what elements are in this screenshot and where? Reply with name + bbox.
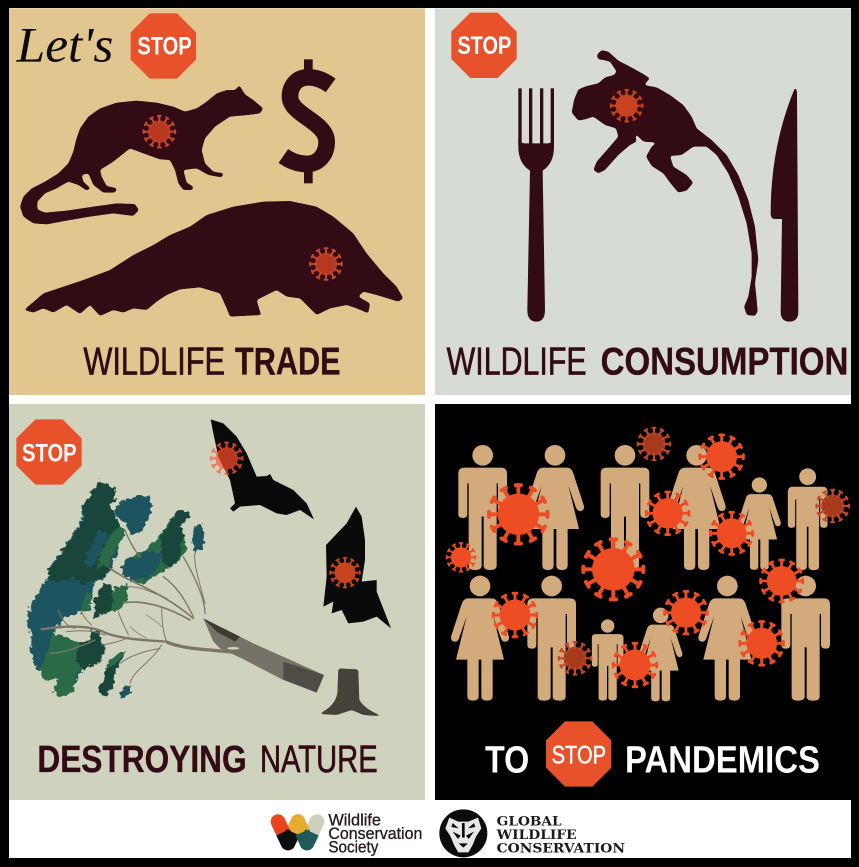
stop sign: STOP	[137, 33, 192, 61]
script text: Let's: Let's	[16, 17, 113, 73]
bat with virus	[211, 419, 314, 519]
text: Global Wildlife Conservation	[496, 814, 625, 855]
heading: wildlife trade: TRADE	[235, 339, 341, 383]
stop sign	[131, 13, 196, 79]
virus particles	[447, 428, 849, 687]
civet silhouette	[20, 85, 263, 224]
heading: destroying nature: NATURE	[260, 739, 378, 781]
stop sign: STOP	[552, 741, 606, 769]
heading: to stop pandemics: PANDEMICS	[625, 739, 820, 781]
logo: Wildlife Conservation Society: Wildlife	[328, 810, 381, 829]
tree stump	[318, 668, 386, 717]
fallen tree	[27, 480, 324, 698]
heading: destroying nature: DESTROYING	[37, 739, 247, 781]
panel: wildlife trade	[9, 8, 425, 395]
tree trunk	[167, 618, 324, 693]
tree canopy	[27, 480, 205, 698]
panel: to stop pandemics	[435, 404, 859, 800]
pangolin silhouette	[24, 201, 403, 317]
text: Global Wildlife Conservation: GLOBAL	[497, 814, 562, 829]
tree branches	[42, 530, 205, 683]
panel: wildlife consumption	[435, 8, 851, 395]
logo: Wildlife Conservation Society	[278, 810, 422, 856]
stop sign: STOP	[22, 439, 77, 467]
stop sign: STOP	[457, 32, 511, 60]
virus on pangolin	[310, 248, 342, 280]
dollar sign	[283, 59, 331, 183]
heading: to stop pandemics	[485, 721, 820, 787]
logo: Wildlife Conservation Society: Conservation	[328, 824, 422, 843]
virus on monkey	[611, 90, 642, 121]
logo: tiger badge	[439, 809, 487, 857]
panel: destroying nature	[9, 404, 425, 800]
text: Global Wildlife Conservation: WILDLIFE	[496, 827, 577, 842]
stop sign	[546, 721, 611, 787]
crowd of people	[451, 445, 830, 701]
second bat with virus	[323, 507, 391, 628]
knife	[771, 89, 798, 322]
logo: Wildlife Conservation Society: Society	[328, 837, 379, 856]
heading: wildlife consumption: WILDLIFE	[447, 339, 587, 383]
heading: to stop pandemics: TO	[485, 739, 529, 781]
fork	[518, 88, 554, 322]
heading: wildlife consumption	[447, 339, 848, 383]
monkey silhouette	[572, 50, 758, 316]
text: Global Wildlife Conservation: CONSERVATION	[497, 840, 625, 855]
heading: wildlife trade: WILDLIFE	[83, 339, 225, 383]
footer logos	[278, 809, 625, 857]
virus on civet	[144, 116, 175, 147]
stop sign	[16, 419, 82, 485]
stop sign	[451, 13, 517, 78]
